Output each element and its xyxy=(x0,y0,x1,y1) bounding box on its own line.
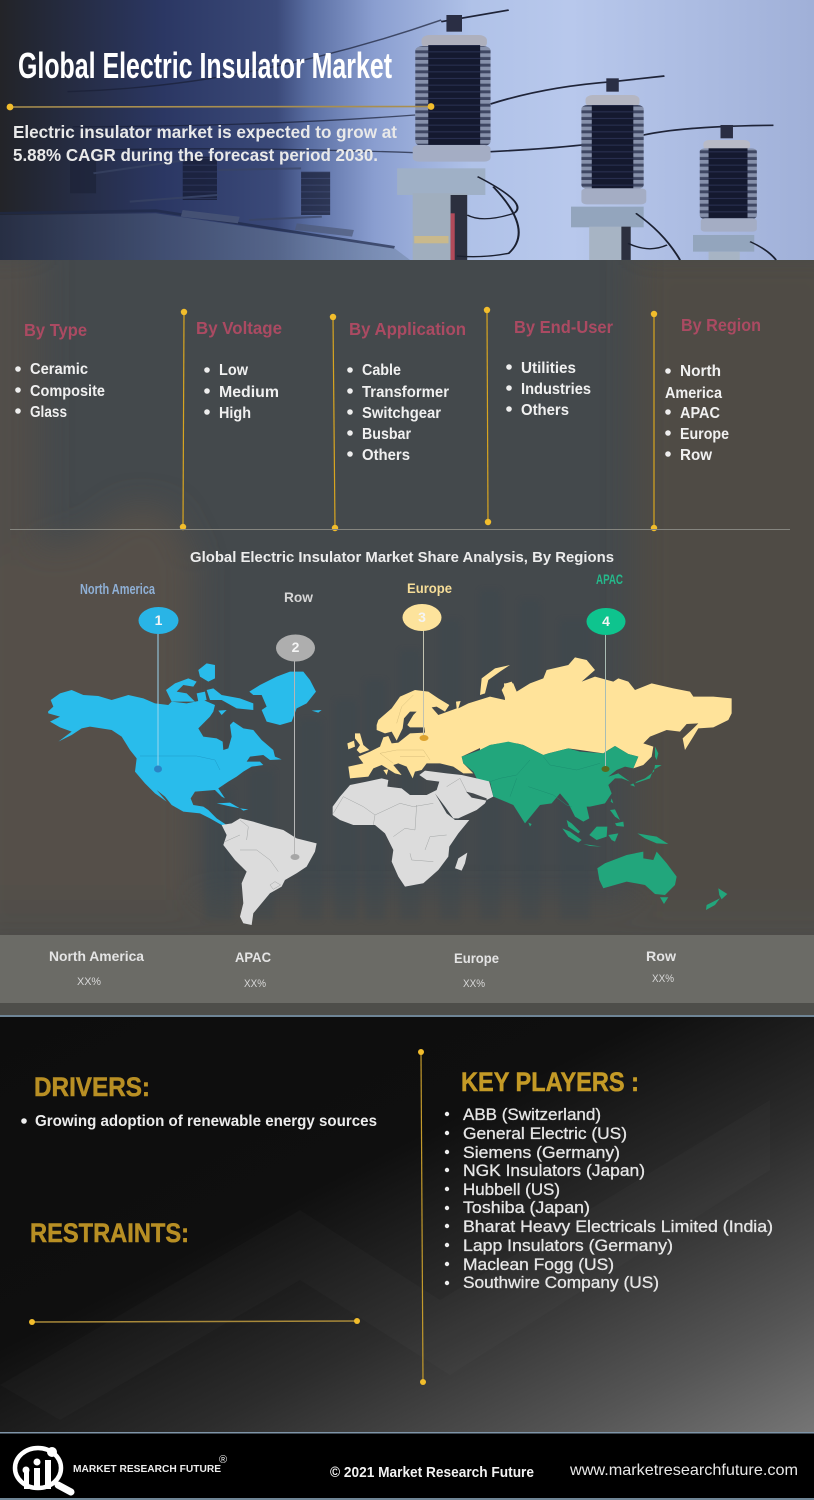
drivers list: Growing adoption of renewable energy sources xyxy=(35,1113,377,1130)
key players list: Lapp Insulators (Germany) xyxy=(463,1237,673,1255)
column: By Region: Europe xyxy=(680,426,729,443)
map pin 2: Row: 2 xyxy=(292,639,300,655)
key players list: Southwire Company (US) xyxy=(463,1274,659,1292)
column: By Region: APAC xyxy=(680,405,720,422)
header banner xyxy=(0,0,814,260)
key players list: ABB (Switzerland) xyxy=(463,1106,601,1124)
website: www.marketresearchfuture.com xyxy=(569,1462,798,1479)
column: By End-User xyxy=(506,317,613,419)
key players list: Toshiba (Japan) xyxy=(463,1199,590,1217)
middle insulator xyxy=(571,78,680,260)
logo wordmark: ® xyxy=(219,1454,227,1466)
share: Europe xyxy=(454,950,499,990)
key players list: Bharat Heavy Electricals Limited (India) xyxy=(463,1218,773,1236)
column: By Application: Switchgear xyxy=(362,405,441,422)
region: Row (South America) xyxy=(222,818,317,925)
logo wordmark: MARKET RESEARCH FUTURE xyxy=(73,1464,221,1475)
map pin 1: North America xyxy=(80,581,178,772)
subtitle: 5.88% CAGR during the forecast period 2030. xyxy=(13,145,378,165)
column: By Application: Busbar xyxy=(362,426,411,443)
column: By Voltage: High xyxy=(219,405,251,422)
column: By Region: North xyxy=(680,363,721,380)
key players heading: KEY PLAYERS : xyxy=(461,1067,639,1097)
share: APAC xyxy=(235,949,271,990)
subtitle xyxy=(13,122,397,165)
lower panel background xyxy=(0,1015,814,1432)
region: Europe and Russia xyxy=(347,657,732,778)
column: By Voltage: By Voltage xyxy=(196,318,282,338)
large insulator xyxy=(397,15,519,260)
column: By Type: Ceramic xyxy=(30,361,88,378)
segmentation and map panel background xyxy=(0,250,814,1017)
drivers heading: DRIVERS: xyxy=(34,1072,150,1102)
column: By End-User: Industries xyxy=(521,381,591,398)
map heading: Global Electric Insulator Market Share Analysis, By Regions xyxy=(190,549,614,566)
column: By Application: Transformer xyxy=(362,384,449,401)
divider 4 xyxy=(651,311,657,531)
column: By Application: Others xyxy=(362,447,410,464)
column: By Region: America xyxy=(665,385,722,402)
key players list: General Electric (US) xyxy=(463,1125,627,1143)
gold rule under restraints xyxy=(29,1318,360,1325)
subtitle: Electric insulator market is expected to grow at xyxy=(13,122,397,142)
key players list: Siemens (Germany) xyxy=(463,1144,620,1162)
photo: insulators and wires xyxy=(0,10,776,260)
map pin 4: APAC: 4 xyxy=(602,613,610,629)
column: By End-User: Others xyxy=(521,402,569,419)
map pin 4: APAC: APAC xyxy=(596,571,623,587)
share: APAC: XX% xyxy=(244,978,266,990)
column: By Region xyxy=(665,315,761,464)
divider 2 xyxy=(330,314,338,531)
divider 1 xyxy=(180,309,187,530)
column: By Region: By Region xyxy=(681,315,761,335)
map pin 1: North America: 1 xyxy=(155,612,163,628)
region: Row (Africa and Middle East) xyxy=(333,771,493,887)
share strip xyxy=(0,935,814,1015)
divider 3 xyxy=(484,307,491,525)
column: By Type xyxy=(15,320,105,421)
map pin 2: Row: Row xyxy=(284,589,313,605)
column: By End-User: Utilities xyxy=(521,360,576,377)
restraints heading: RESTRAINTS: xyxy=(30,1218,189,1248)
share: APAC: APAC xyxy=(235,949,271,965)
share: Row xyxy=(646,948,676,985)
column: By Voltage: Medium xyxy=(219,384,279,401)
column: By Application: By Application xyxy=(349,319,466,339)
share: North America: XX% xyxy=(77,976,101,988)
region: APAC xyxy=(462,742,727,910)
column: By Type: Composite xyxy=(30,383,105,400)
column: By Region: Row xyxy=(680,447,713,464)
column: By Application xyxy=(347,319,466,464)
map pin 3: Europe xyxy=(402,580,452,741)
key players list xyxy=(445,1106,773,1292)
gold rule under title xyxy=(7,103,434,110)
icon: magnifier logo xyxy=(15,1447,71,1492)
map pin 3: Europe: Europe xyxy=(407,580,452,596)
region: North America xyxy=(48,663,322,825)
column: By End-User: By End-User xyxy=(514,317,613,337)
map pin 1: North America: North America xyxy=(80,581,155,598)
share: Row: XX% xyxy=(652,973,674,985)
world map xyxy=(48,657,732,925)
column: By Voltage: Low xyxy=(219,362,249,379)
logo wordmark xyxy=(73,1454,227,1475)
key players list: NGK Insulators (Japan) xyxy=(463,1162,645,1180)
map pin 3: Europe: 3 xyxy=(418,609,426,625)
share: Europe: Europe xyxy=(454,950,499,966)
column: By Voltage xyxy=(196,318,282,422)
key players list: Hubbell (US) xyxy=(463,1181,560,1199)
wires xyxy=(441,10,773,152)
share: Europe: XX% xyxy=(463,978,485,990)
share: Row: Row xyxy=(646,948,676,964)
column: By Type: Glass xyxy=(30,404,67,421)
copyright: © 2021 Market Research Future xyxy=(330,1465,534,1481)
footer xyxy=(0,1432,814,1500)
map pin 4: APAC xyxy=(586,571,626,772)
share: North America: North America xyxy=(49,948,144,964)
column: By Application: Cable xyxy=(362,362,401,379)
small insulator xyxy=(693,125,776,260)
column: By Type: By Type xyxy=(24,320,87,340)
title: Global Electric Insulator Market xyxy=(18,45,392,86)
key players list: Maclean Fogg (US) xyxy=(463,1256,614,1274)
map pin 2: Row xyxy=(276,589,315,860)
vertical gold divider xyxy=(418,1049,426,1385)
faint background insulators xyxy=(0,20,441,260)
share: North America xyxy=(49,948,144,988)
